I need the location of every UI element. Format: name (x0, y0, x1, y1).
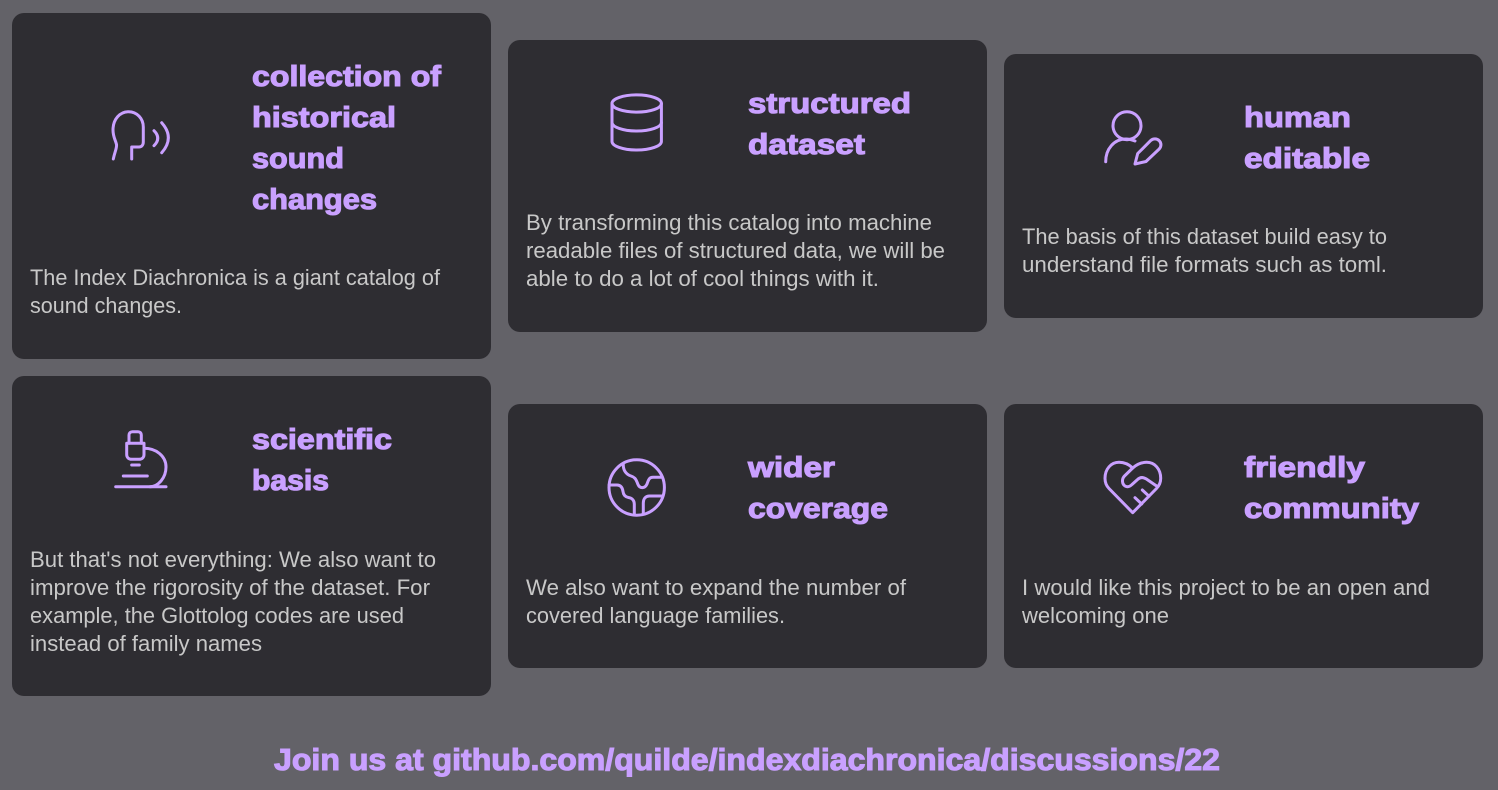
body text: welcoming one (1021, 603, 1169, 628)
heading: historical (252, 102, 396, 134)
panel: scientific basis (12, 376, 491, 696)
body text (526, 575, 907, 628)
icon: microscope (116, 432, 166, 487)
panel: collection of historical sound changes (12, 13, 491, 359)
panel: human editable (1004, 54, 1483, 318)
heading (1244, 452, 1419, 525)
footer call to action: Join us at github.com/quilde/indexdiachronica/discussions/22 (274, 742, 1220, 777)
panel: friendly community (1004, 404, 1483, 668)
body text: I would like this project to be an open and (1022, 575, 1430, 600)
body text: The basis of this dataset build easy to (1022, 224, 1387, 249)
body text (1021, 575, 1430, 628)
body text: able to do a lot of cool things with it. (526, 266, 879, 291)
body text: sound changes. (30, 293, 182, 318)
body text: The Index Diachronica is a giant catalog of (30, 265, 441, 290)
body text: improve the rigorosity of the dataset. For (30, 575, 430, 600)
heading: changes (252, 184, 377, 216)
heading: editable (1244, 143, 1370, 175)
icon: globe (609, 460, 664, 515)
heading: structured (748, 88, 911, 120)
body text (526, 210, 945, 291)
body text (1022, 224, 1387, 277)
panel: wider coverage (508, 404, 987, 668)
icon: database (612, 95, 661, 150)
heading: friendly (1244, 452, 1365, 484)
body text: understand file formats such as toml. (1022, 252, 1387, 277)
heading (747, 452, 888, 525)
heading: sound (252, 143, 344, 175)
heading: collection of (252, 61, 441, 93)
body text: example, the Glottolog codes are used (30, 603, 404, 628)
heading (1244, 102, 1370, 175)
heading (748, 88, 911, 161)
panel: structured dataset (508, 40, 987, 332)
body text: We also want to expand the number of (526, 575, 907, 600)
icon: heart handshake (1105, 462, 1161, 513)
heading (252, 424, 392, 497)
body text: covered language families. (526, 603, 785, 628)
body text (30, 547, 436, 656)
body text: By transforming this catalog into machine (526, 210, 932, 235)
heading (252, 61, 441, 216)
body text: But that's not everything: We also want to (30, 547, 436, 572)
body text: readable files of structured data, we will be (526, 238, 945, 263)
body text: instead of family names (30, 631, 262, 656)
icon: person with pencil (1106, 112, 1161, 164)
heading: coverage (748, 493, 888, 525)
heading: scientific (252, 424, 392, 456)
body text (30, 265, 441, 318)
icon: speaking head (113, 112, 168, 159)
heading: wider (747, 452, 835, 484)
heading: human (1244, 102, 1351, 134)
heading: dataset (748, 129, 865, 161)
heading: basis (252, 465, 329, 497)
heading: community (1244, 493, 1419, 525)
